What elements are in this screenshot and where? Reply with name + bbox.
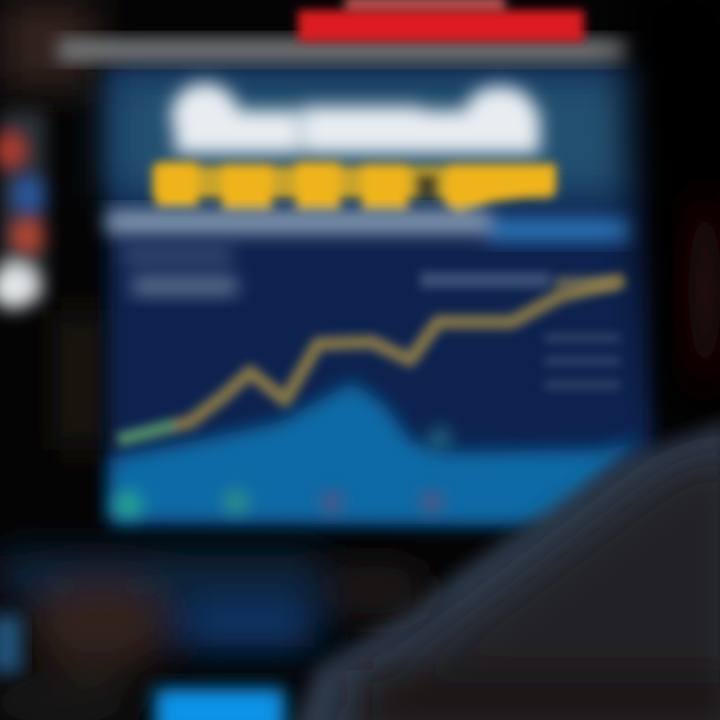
red banner — [298, 0, 584, 42]
white headline blur — [171, 83, 540, 154]
left-edge blue glow — [0, 615, 22, 673]
text block: left labels — [122, 250, 237, 294]
background: top-left room glow — [0, 0, 95, 450]
blue area chart — [110, 382, 640, 525]
reddish glow behind head — [687, 190, 720, 390]
monitor screen — [108, 66, 653, 524]
gold line chart — [118, 280, 625, 440]
hand and keyboard — [0, 555, 430, 720]
screen header panel — [108, 72, 638, 197]
top grey header band — [58, 38, 630, 62]
left-side app icons — [0, 110, 46, 309]
grey-blue info band — [106, 210, 632, 242]
silhouette: head — [628, 0, 720, 430]
axis tick colours — [114, 429, 449, 519]
text block: right labels — [420, 272, 620, 388]
yellow highlight band — [152, 162, 556, 216]
bright blue keyboard light — [155, 688, 285, 720]
silhouette: shoulder — [290, 420, 720, 720]
